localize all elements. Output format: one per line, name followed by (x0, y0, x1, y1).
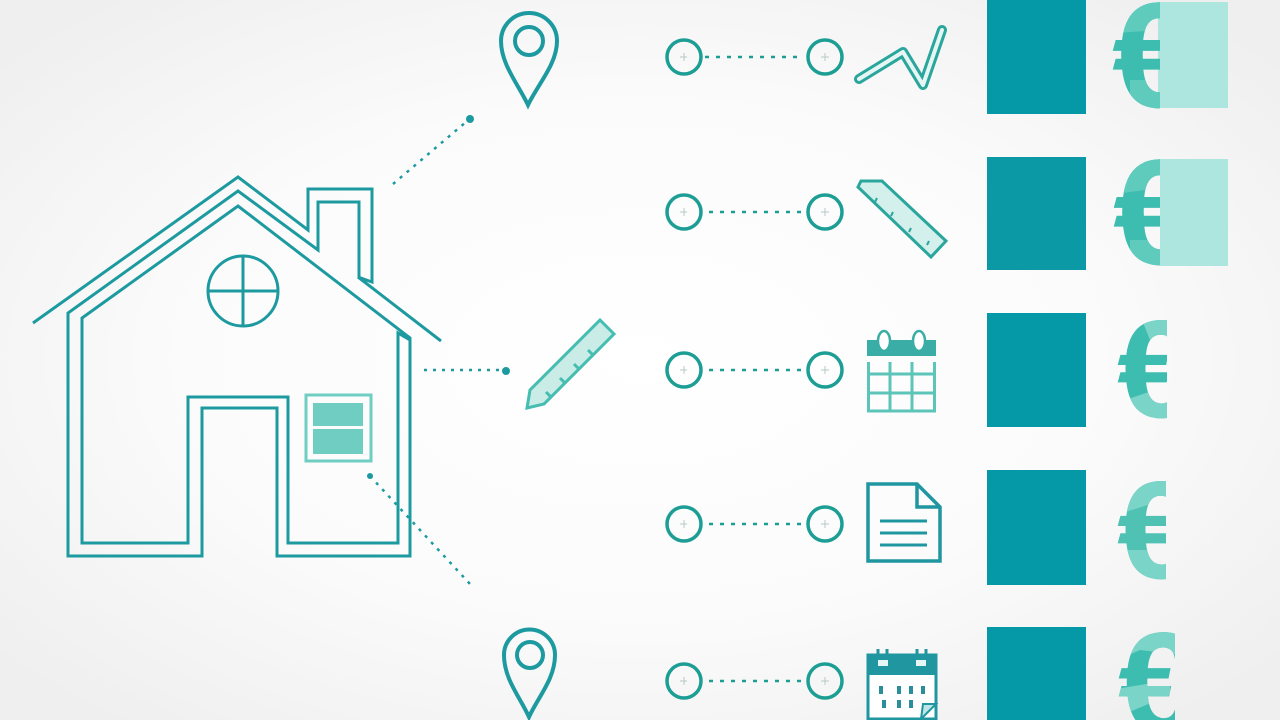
teal block row 4 (987, 470, 1086, 585)
euro row 4: € (1117, 453, 1194, 608)
row 3 connector (667, 353, 842, 387)
teal block row 2 (987, 157, 1086, 270)
icon: tear-off calendar (867, 649, 936, 719)
icon: document (868, 484, 940, 561)
icon: trend line (859, 30, 942, 85)
euro row 3: € (1117, 292, 1194, 447)
euro row 4: € (1117, 453, 1194, 608)
euro row 3 (1118, 320, 1167, 418)
row 2 connector (667, 195, 842, 229)
icon: calendar (867, 331, 936, 411)
icon: bottom map pin (504, 630, 555, 717)
icon: top map pin (501, 13, 557, 105)
teal block row 5 (987, 627, 1086, 720)
euro row 2: € (1113, 128, 1196, 296)
euro row 4 (1118, 481, 1166, 580)
row 1 connector (667, 40, 842, 74)
teal block row 3 (987, 313, 1086, 427)
euro row 3: € (1117, 292, 1194, 447)
dotted connector: house to pencil (424, 367, 510, 375)
euro row 1 (1112, 2, 1160, 108)
light panel row 2 (1160, 159, 1228, 266)
icon: house (33, 177, 441, 556)
row 5 connector (667, 664, 842, 698)
icon: ruler (858, 181, 946, 257)
euro row 2: € (1113, 128, 1196, 296)
icon: pencil (527, 320, 614, 408)
teal block row 1 (987, 0, 1086, 114)
row 4 connector (667, 507, 842, 541)
dotted connector: house to bottom pin (367, 473, 470, 584)
light panel row 1 (1158, 2, 1228, 108)
euro row 2 (1114, 159, 1160, 266)
euro row 5 (1118, 632, 1175, 720)
dotted connector: house to top pin (393, 115, 474, 184)
